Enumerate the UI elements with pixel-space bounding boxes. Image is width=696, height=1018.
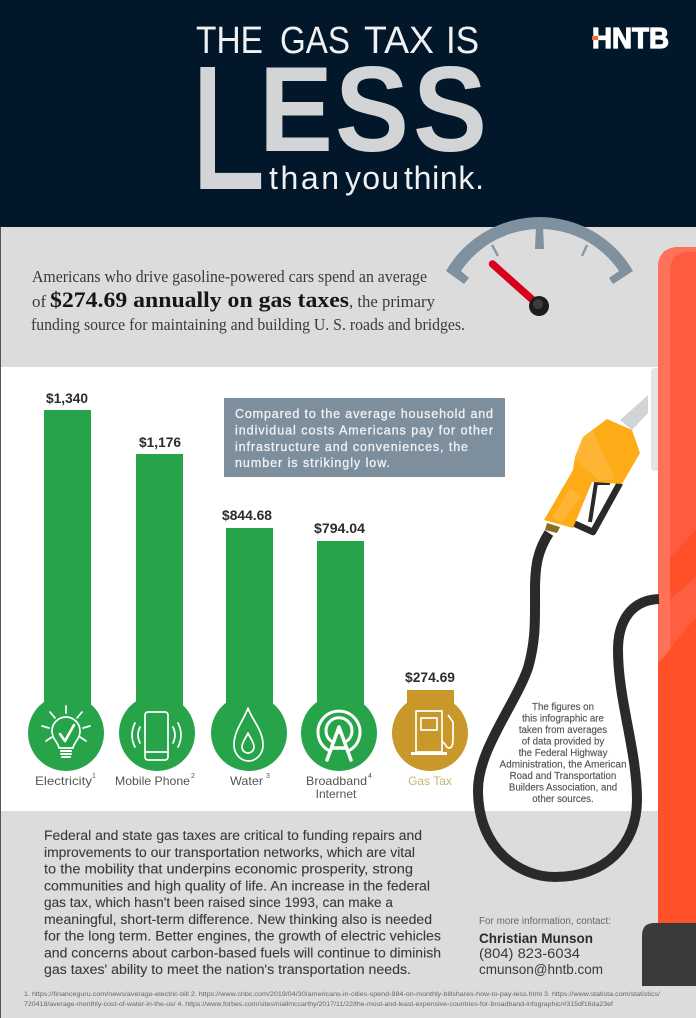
intro paragraph: $274.69 annually on gas taxes [50,287,349,312]
body paragraph: Federal and state gas taxes are critical to funding repairs and [44,828,422,843]
body paragraph: gas tax, which hasn't been raised since 1993, can make a [44,895,393,910]
contact block: (804) 823-6034 [479,946,581,961]
callout box: individual costs Americans pay for other [235,424,493,438]
bar: mobile phone [115,435,195,788]
title line: than you think: than [269,160,339,196]
body paragraph: gas taxes' ability to meet the nation's transportation needs. [44,962,411,977]
contact block: Christian Munson [479,931,593,946]
bar: gas tax [392,670,468,788]
bar: mobile phone: 2 [191,773,195,780]
bar: electricity [28,391,104,788]
bar: water: 3 [266,773,270,780]
bar: electricity: $1,340 [46,391,88,406]
icon: light bulb with check [42,706,90,757]
fuel hose [478,533,659,877]
title line: the gas tax is: GAS [280,20,350,62]
bar: water: Water [230,774,263,788]
contact block [479,916,611,977]
footnotes [24,992,660,1008]
bar: gas tax: $274.69 [405,670,455,685]
intro paragraph: , the primary [349,292,435,311]
source note inside hose: the Federal Highway [519,748,608,759]
contact block: cmunson@hntb.com [479,962,603,977]
bar: water [211,508,287,788]
title line: than you think [269,160,484,196]
source note inside hose: Road and Transportation [510,771,616,782]
title line: than you think: you [345,160,399,196]
body paragraph [44,828,441,977]
intro paragraph: Americans who drive gasoline-powered cars spend an average [32,267,427,286]
source note inside hose: The figures on [532,702,594,713]
bar: broadband internet: 4 [368,773,372,780]
intro paragraph [31,267,465,334]
body paragraph: to the mobility that underpins economic prosperity, strong [44,862,413,876]
fuel nozzle [544,395,648,533]
header panel [0,0,696,227]
bar: broadband internet [301,521,377,801]
intro paragraph: of [32,292,46,311]
bar: electricity: 1 [92,773,96,780]
title big letters ESS [259,41,487,177]
bar: electricity: Electricity [35,774,92,788]
bar: mobile phone: Mobile Phone [115,774,190,788]
icon: water drop [234,708,263,761]
source note inside hose: of data provided by [522,737,604,748]
icon: gas pump [411,711,453,754]
callout box: Compared to the average household and [235,407,493,421]
title line: the gas tax is: THE [196,20,263,62]
pump holster [651,368,663,471]
callout box [224,398,505,477]
body paragraph: communities and high quality of life. An increase in the federal [44,878,430,894]
title line: the gas tax is [196,20,479,62]
body paragraph: and concerns about carbon-based fuels will continue to diminish [44,946,441,960]
gas pump body [642,247,696,986]
title line: than you think: think. [404,160,484,196]
source note inside hose: other sources. [532,794,594,805]
title line: the gas tax is: IS [446,20,479,62]
source note inside hose: this infographic are [522,714,604,724]
icon: broadcast tower [318,711,360,760]
top grey band [0,227,696,367]
bar: mobile phone: $1,176 [139,435,181,450]
intro paragraph: funding source for maintaining and building U. S. roads and bridges. [31,315,465,334]
HNTB logo: HNTB [592,23,669,55]
source note inside hose: taken from averages [519,725,607,736]
body paragraph: meaningful, short-term difference. New thinking also is needed [44,912,432,927]
icon: ringing phone [132,712,181,760]
title big letters ESS: S [413,41,487,177]
pump base [642,923,696,986]
title line: the gas tax is: TAX [364,20,434,62]
contact block: For more information, contact: [479,916,611,927]
bar: broadband internet: Broadband [306,774,367,788]
bottom grey band [0,811,696,1018]
bar: gas tax: Gas Tax [408,774,452,788]
bar: broadband internet: Internet [316,787,357,801]
title big letter L: L [191,30,264,224]
bar: water: $844.68 [222,508,272,523]
bar: broadband internet: $794.04 [314,521,365,536]
title big letters ESS: E [259,41,333,177]
callout box: infrastructure and conveniences, the [235,440,468,454]
footnotes: 720418/average-monthly-cost-of-water-in-the-us/ 4. https://www.forbes.com/sites/niallmccarthy/2017/11/22/the-most-and-least-expensive-countries-for-broadband-infographic/#315df16da23ef [24,1002,613,1008]
source note inside hose: Administration, the American [500,760,626,771]
source note inside hose [500,702,626,805]
title big letters ESS: S [335,41,409,177]
fuel gauge icon [446,217,633,316]
footnotes: 1. https://financeguru.com/news/average-electric-bill 2. https://www.cnbc.com/2019/04/30/americans-in-cities-spend-984-on-monthly-billshares-how-to-pay-less.html 3. https://www.statista.com/statistics/ [24,992,660,998]
body paragraph: improvements to our transportation networks, which are vital [44,845,415,860]
callout box: number is strikingly low. [235,456,390,470]
source note inside hose: Builders Association, and [509,783,617,794]
body paragraph: for the long term. Better engines, the growth of electric vehicles [44,928,441,944]
